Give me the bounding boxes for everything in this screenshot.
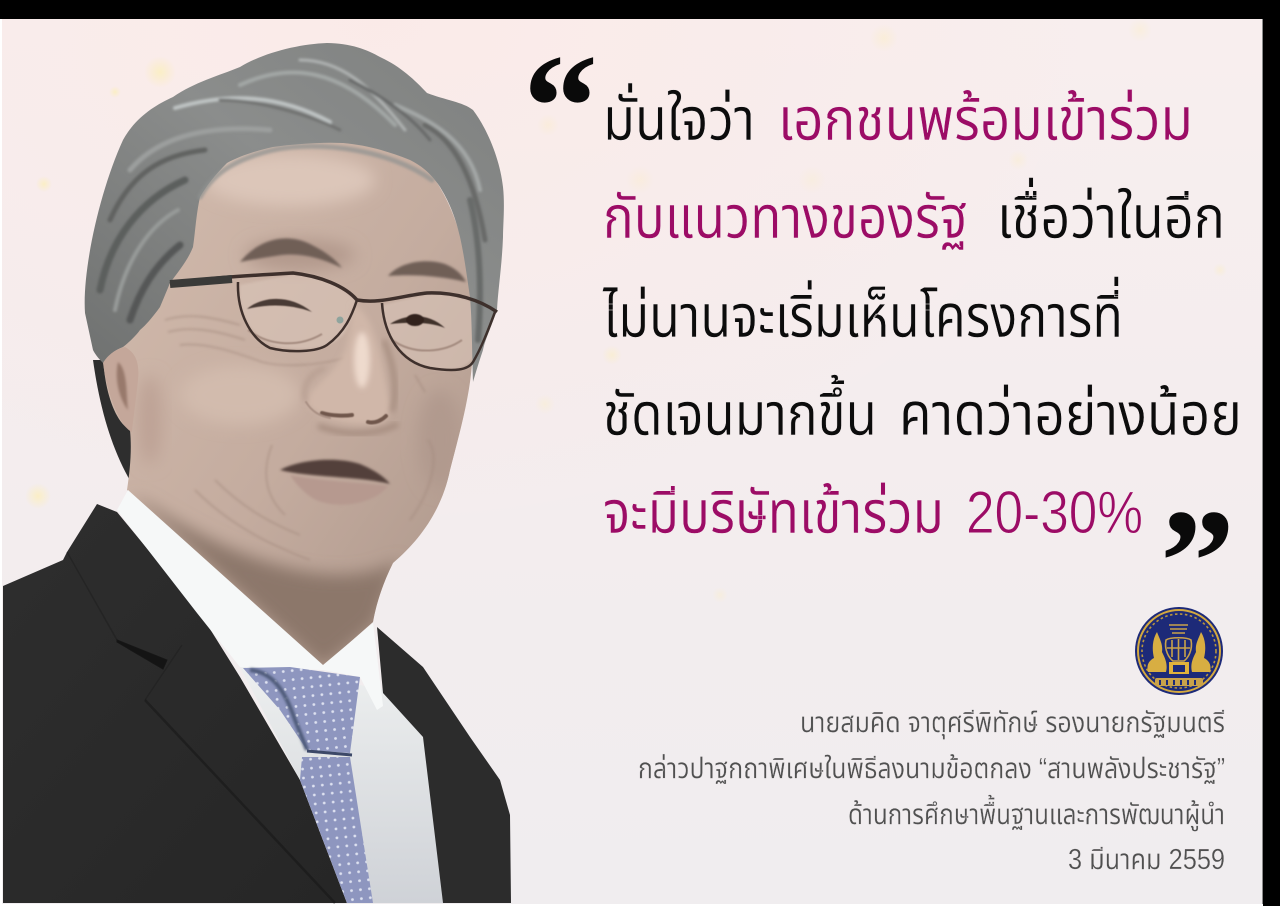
mouth bbox=[280, 460, 390, 505]
eyes bbox=[247, 299, 462, 351]
quote line 2 bbox=[603, 177, 1225, 251]
neck and face bbox=[103, 125, 473, 668]
hair strands bbox=[100, 60, 485, 340]
quote line 2: เชื่อว่าในอีก bbox=[997, 177, 1225, 251]
tie crease bbox=[307, 751, 352, 755]
tie knot bbox=[243, 667, 360, 753]
hair bbox=[85, 43, 504, 382]
quote line 4: ชัดเจนมากขึ้น bbox=[603, 374, 877, 448]
background sparkles bbox=[25, 18, 1227, 603]
glasses bbox=[170, 273, 497, 370]
opening quote mark: “ bbox=[523, 24, 598, 190]
collar bbox=[117, 490, 383, 710]
quote line 5: จะมีบริษัทเข้าร่วม bbox=[603, 479, 944, 546]
forehead highlight bbox=[205, 154, 375, 206]
quote line 4 bbox=[603, 374, 1242, 448]
nostrils bbox=[306, 402, 386, 423]
cheek shading bbox=[189, 369, 296, 422]
closing quote mark: ” bbox=[1160, 479, 1235, 645]
eyebrows bbox=[240, 238, 466, 282]
tie blade bbox=[300, 757, 373, 903]
dark hair behind ear bbox=[93, 360, 140, 484]
speaker attribution bbox=[638, 707, 1225, 876]
seal lions bbox=[1147, 632, 1211, 672]
attribution line 4: 3 มีนาคม 2559 bbox=[1068, 844, 1225, 876]
ear bbox=[103, 347, 138, 432]
portrait of speaker bbox=[3, 43, 511, 903]
tie knot shadow bbox=[250, 670, 307, 750]
quote line 1: มั่นใจว่า bbox=[603, 82, 755, 153]
wrinkles bbox=[165, 316, 434, 560]
lens tint bbox=[240, 274, 490, 370]
jacket right bbox=[377, 627, 511, 903]
lapel shading bbox=[67, 552, 335, 903]
nose bbox=[304, 305, 398, 433]
neck shadow bbox=[130, 495, 400, 668]
quote line 1 bbox=[603, 82, 1193, 153]
quote text bbox=[602, 82, 1242, 546]
quote line 5: 20-30% bbox=[966, 479, 1143, 546]
attribution line 1: นายสมคิด จาตุศรีพิทักษ์ รองนายกรัฐมนตรี bbox=[800, 707, 1225, 739]
brow shadow bbox=[245, 239, 355, 271]
quote line 1: เอกชนพร้อมเข้าร่วม bbox=[778, 86, 1193, 153]
quote line 3: ไม่นานจะเริ่มเห็นโครงการที่ bbox=[602, 276, 1123, 350]
icon: government seal bbox=[1135, 607, 1223, 695]
shirt bbox=[236, 660, 443, 903]
seal base bbox=[1169, 662, 1189, 674]
quote line 2: กับแนวทางของรัฐ bbox=[603, 184, 968, 251]
jacket left bbox=[3, 504, 347, 903]
seal urn bbox=[1166, 625, 1191, 661]
quote line 4: คาดว่าอย่างน้อย bbox=[899, 381, 1242, 448]
